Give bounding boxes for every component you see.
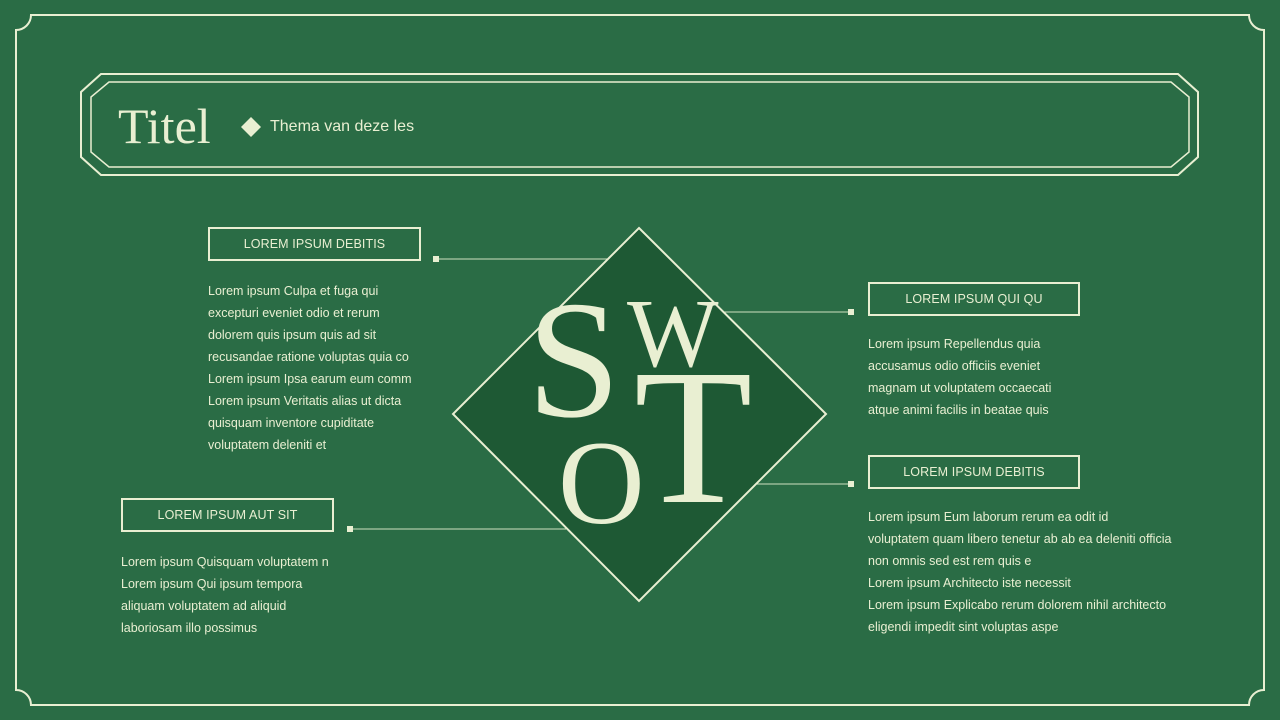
text block: Lorem ipsum Architecto iste necessit — [868, 576, 1071, 590]
heading box — [868, 282, 1080, 316]
text block: voluptatem quam libero tenetur ab ab ea deleniti officia — [868, 532, 1171, 546]
panel: strengths — [208, 227, 421, 452]
text block: dolorem quis ipsum quis ad sit — [208, 328, 376, 342]
heading box — [868, 455, 1080, 489]
SWOT letters — [527, 267, 753, 549]
connector lines — [350, 259, 851, 529]
heading box — [208, 227, 421, 261]
text block: aliquam voluptatem ad aliquid — [121, 599, 286, 613]
text block: quisquam inventore cupiditate — [208, 416, 374, 430]
panel: opportunities — [121, 498, 334, 635]
text block: Lorem ipsum Quisquam voluptatem n — [121, 555, 329, 569]
text block: Lorem ipsum Explicabo rerum dolorem nihil architecto — [868, 598, 1166, 612]
SWOT letters: W — [627, 280, 719, 387]
heading box: LOREM IPSUM AUT SIT — [158, 508, 297, 522]
heading box: LOREM IPSUM DEBITIS — [903, 465, 1045, 479]
text block: eligendi impedit sint voluptas aspe — [868, 620, 1058, 634]
panel: threats — [868, 455, 1172, 634]
text block: voluptatem deleniti et — [208, 438, 326, 452]
heading box: LOREM IPSUM QUI QU — [905, 292, 1043, 306]
text block: Lorem ipsum Culpa et fuga qui — [208, 284, 378, 298]
text block: Lorem ipsum Eum laborum rerum ea odit id — [868, 510, 1108, 524]
title diamond bullet — [241, 117, 261, 137]
text block: laboriosam illo possimus — [121, 621, 257, 635]
text block: atque animi facilis in beatae quis — [868, 403, 1049, 417]
SWOT letters: T — [634, 329, 753, 544]
SWOT letters: O — [558, 416, 645, 549]
diamond — [453, 228, 826, 601]
text block: Lorem ipsum Veritatis alias ut dicta — [208, 394, 401, 408]
text block: Lorem ipsum Repellendus quia — [868, 337, 1040, 351]
heading box: LOREM IPSUM DEBITIS — [244, 237, 385, 251]
text block — [868, 510, 1172, 634]
title box outer — [81, 74, 1198, 175]
text block: magnam ut voluptatem occaecati — [868, 381, 1051, 395]
text block — [208, 284, 412, 452]
text block: non omnis sed est rem quis e — [868, 554, 1031, 568]
heading box — [121, 498, 334, 532]
text block: Lorem ipsum Ipsa earum eum comm — [208, 372, 412, 386]
SWOT letters: S — [527, 267, 620, 453]
text block: accusamus odio officiis eveniet — [868, 359, 1040, 373]
subtitle: Thema van deze les — [270, 118, 414, 135]
title: Titel — [118, 98, 211, 154]
text block — [121, 555, 329, 635]
text block — [868, 337, 1051, 417]
text block: excepturi eveniet odio et rerum — [208, 306, 380, 320]
text block: recusandae ratione voluptas quia co — [208, 350, 409, 364]
panel: weaknesses — [868, 282, 1080, 417]
text block: Lorem ipsum Qui ipsum tempora — [121, 577, 302, 591]
